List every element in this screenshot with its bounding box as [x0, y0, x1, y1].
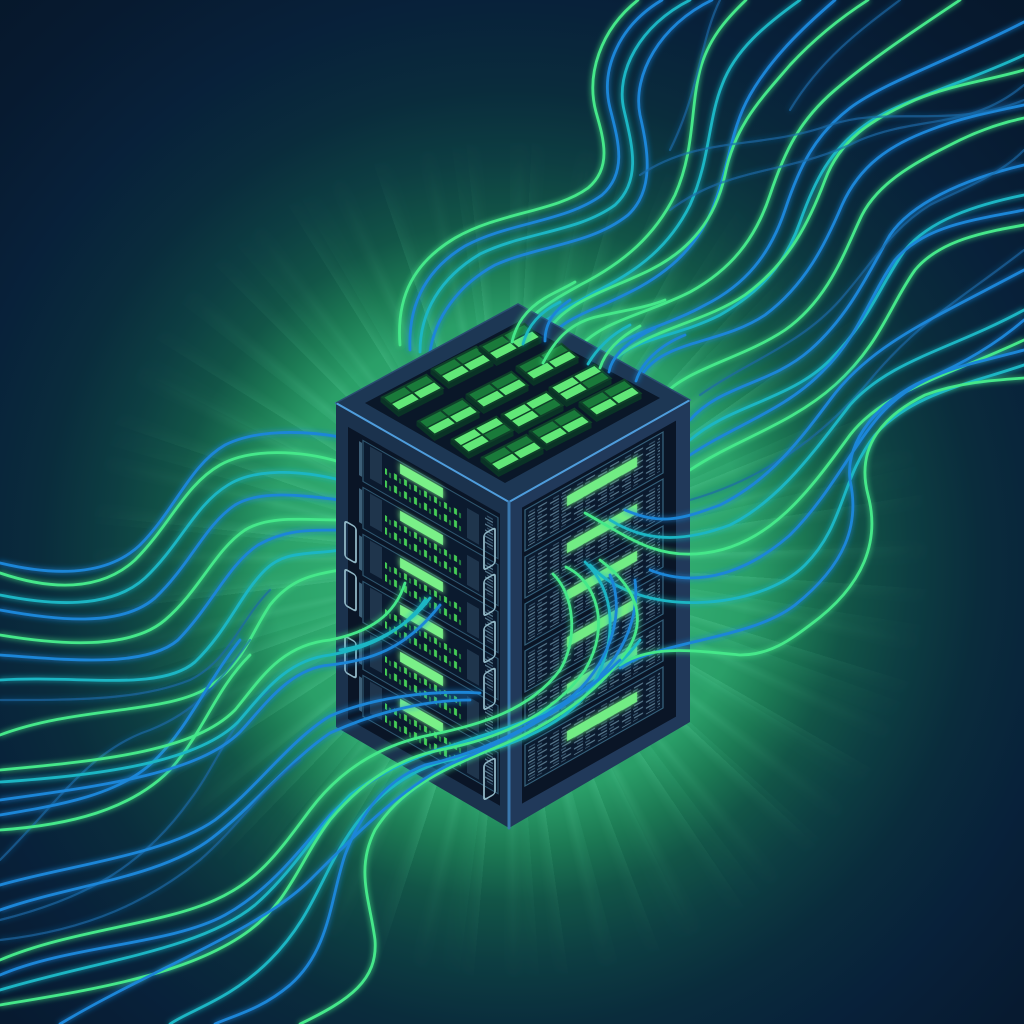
rack top [336, 304, 690, 502]
data streams right, entering right face [585, 270, 1024, 668]
rack edge highlights [336, 304, 690, 828]
rack right side [509, 400, 690, 828]
top chips [380, 323, 642, 477]
data streams entering rack top [512, 282, 685, 381]
data streams upper right [399, 0, 1024, 470]
server rack [336, 304, 690, 828]
data streams left, behind rack [0, 432, 340, 920]
rack handles left [345, 521, 356, 678]
rack left side [336, 403, 509, 828]
data streams entering left face [0, 583, 440, 800]
top inner recess [365, 322, 660, 483]
light rays [170, 217, 853, 902]
rack handles centre [484, 528, 495, 800]
right face servers [522, 421, 676, 804]
data streams lower left, crossing the rack [0, 560, 640, 1024]
data streams right, behind rack [690, 250, 1024, 500]
left face servers [348, 427, 500, 806]
